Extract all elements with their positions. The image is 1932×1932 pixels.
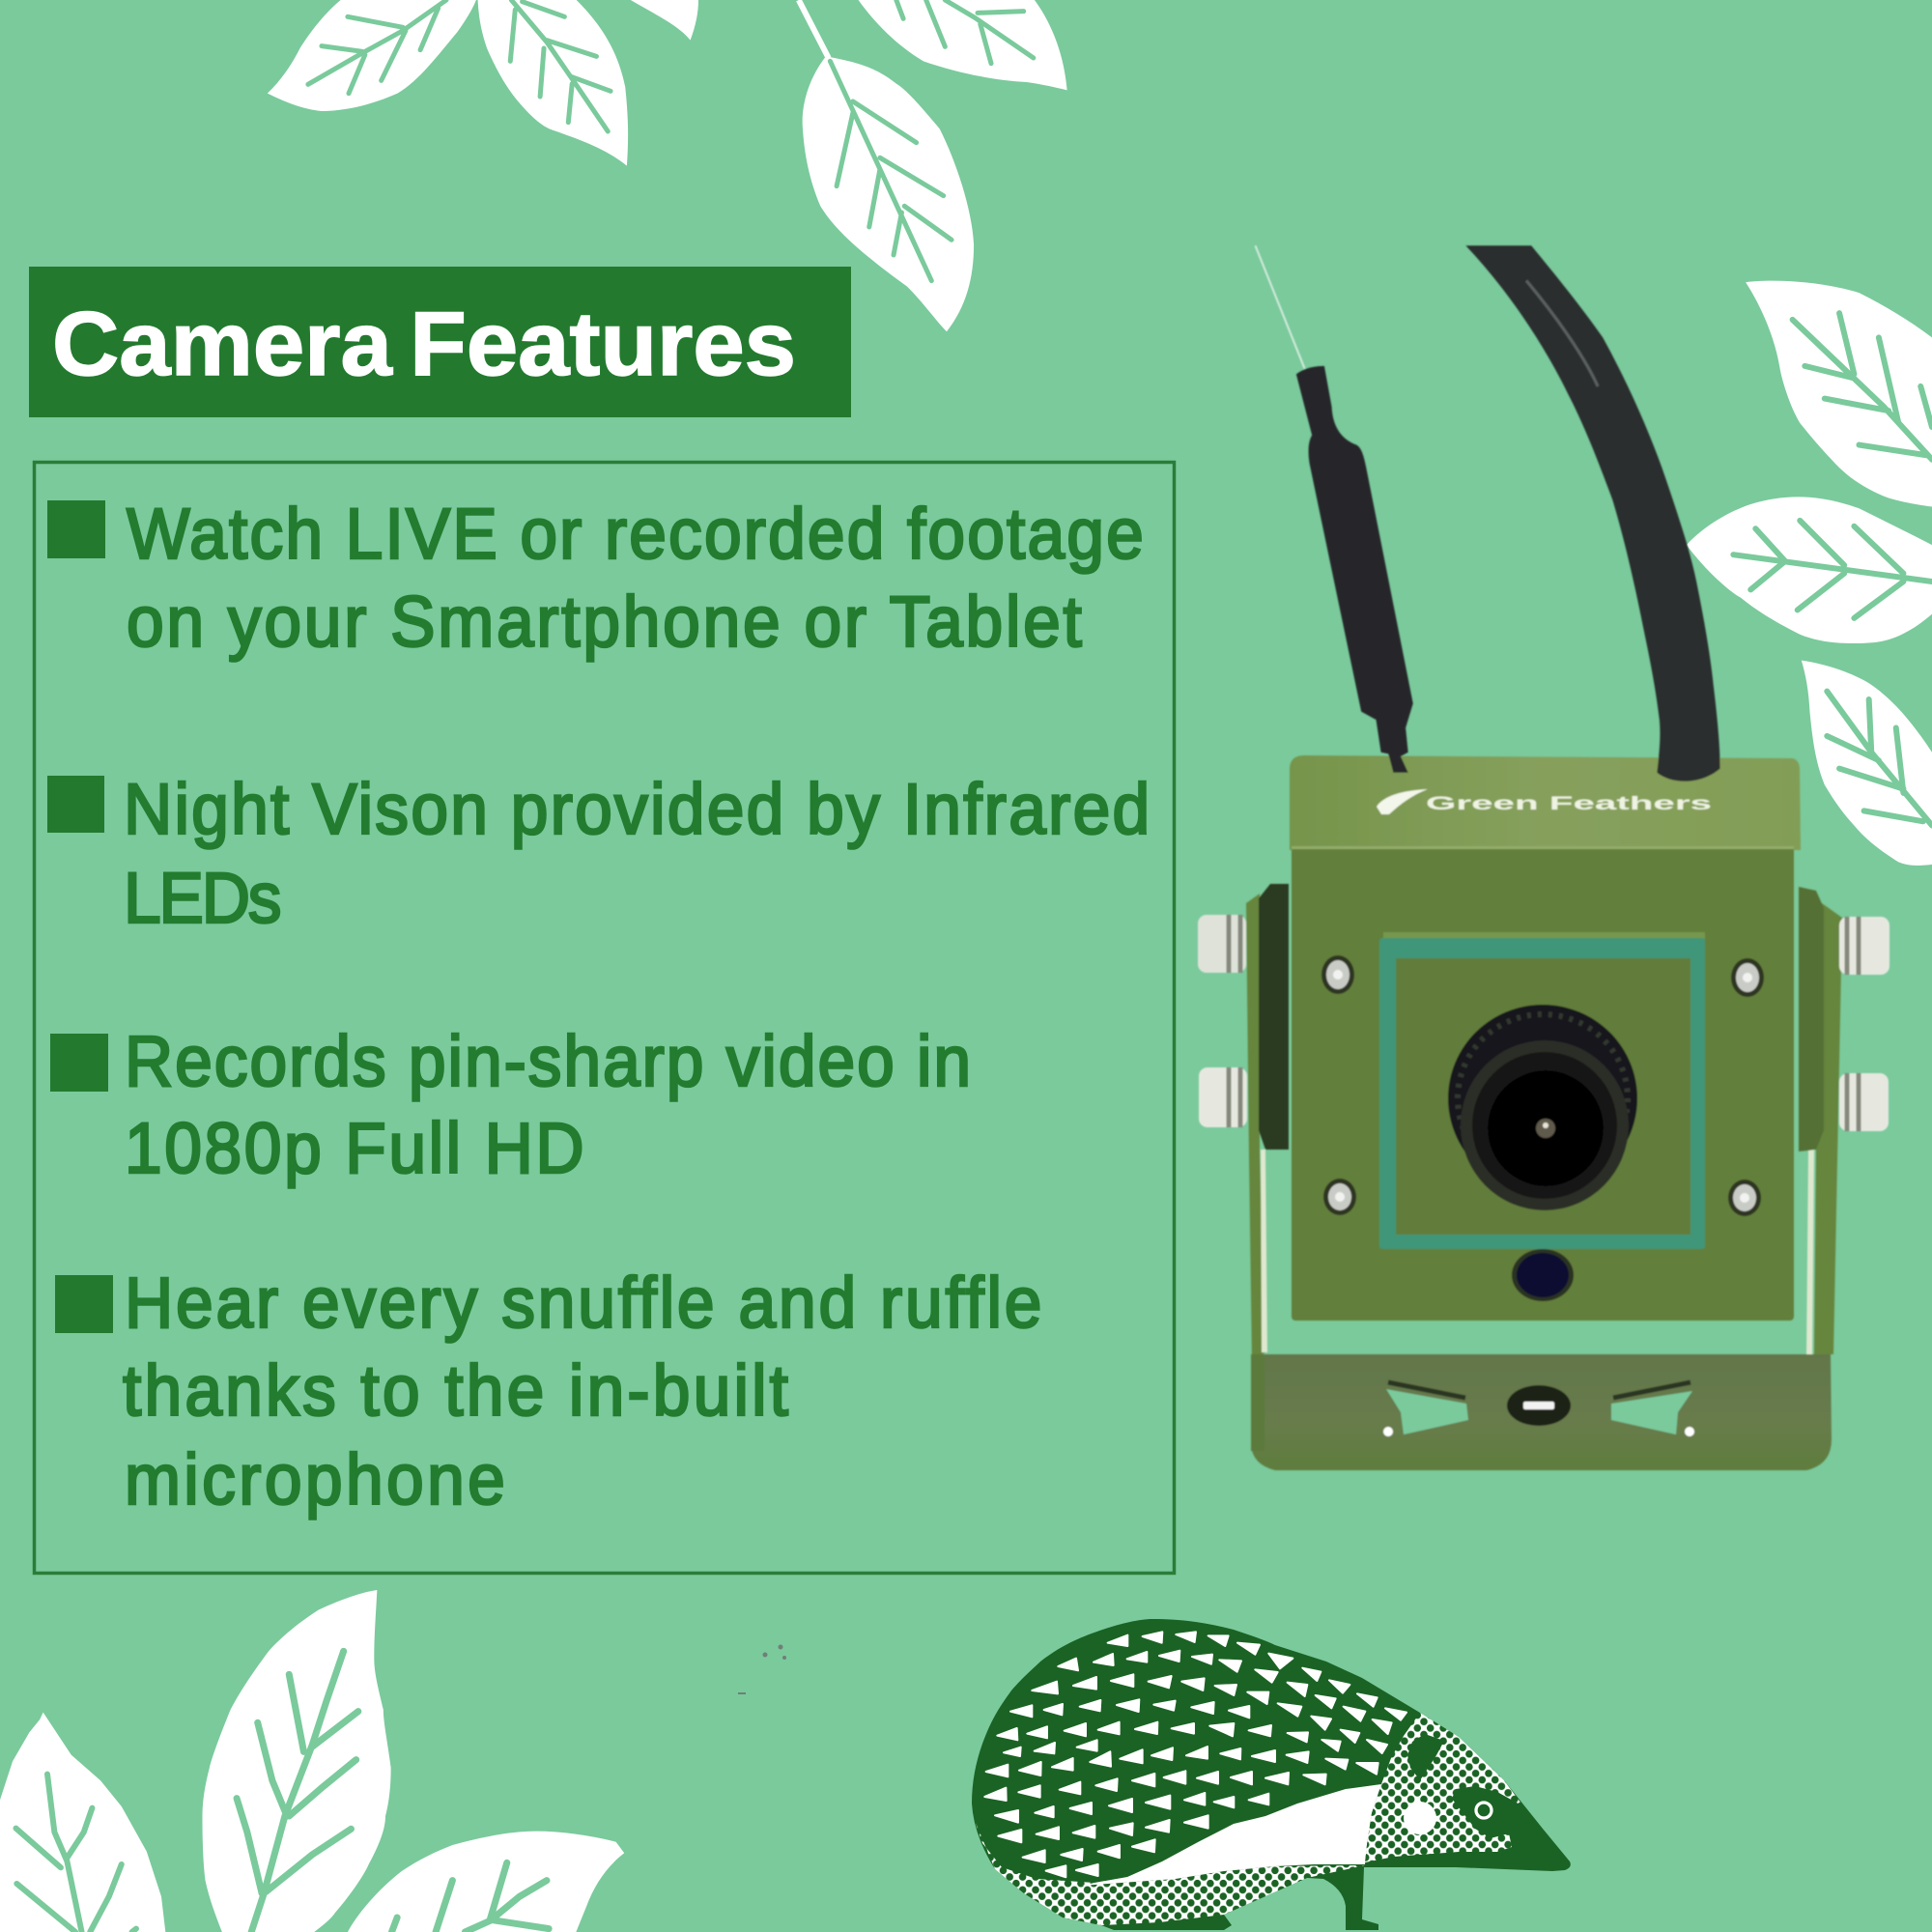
leaf: top right: [859, 0, 1067, 90]
feature: night vision: Night Vison provided by Infrared: [124, 770, 1150, 849]
hedgehog illustration: [972, 1619, 1571, 1930]
heading: Camera Features: [29, 267, 851, 417]
front top edge highlight: [1292, 846, 1794, 849]
bracket base: [1251, 1354, 1832, 1470]
halftone lower body: [976, 1823, 1365, 1925]
ear: [1407, 1734, 1444, 1780]
feature: microphone: Hear every snuffle and ruffle: [125, 1264, 1041, 1343]
top face: [1290, 755, 1801, 850]
camera logo: [1377, 789, 1712, 814]
power cable: [1465, 245, 1720, 781]
leaf: bottom far left: [0, 1713, 165, 1932]
top leaves: [268, 0, 1067, 331]
right leaves: [1687, 281, 1932, 866]
feature: night vision: LEDs: [124, 859, 282, 938]
hedgehog body: [972, 1619, 1571, 1930]
leaf: top fragment: [631, 0, 698, 41]
feature: live footage: on your Smartphone or Tablet: [127, 582, 1082, 662]
feature: full HD video: Records pin-sharp video in: [125, 1022, 971, 1101]
bottom left leaves: [0, 1590, 624, 1932]
arm highlights: [1261, 1150, 1814, 1354]
heading: Camera Features: Camera Features: [52, 293, 796, 394]
corner bolts: [1321, 955, 1764, 1216]
feature: full HD video: [50, 1022, 971, 1188]
leaf: right middle: [1687, 497, 1932, 643]
left mounting arm: [1246, 894, 1265, 1362]
leaf: right upper: [1746, 281, 1932, 507]
lens plate highlight: [1383, 932, 1705, 939]
leaf: right lower: [1802, 661, 1932, 866]
antenna and cable: [1255, 245, 1720, 781]
spines, rear: [984, 1632, 1293, 1877]
lens: [1448, 1005, 1637, 1210]
halftone head: [1365, 1713, 1523, 1862]
eye: [1476, 1803, 1492, 1818]
panel: features list: [35, 462, 1175, 1573]
leaf: top second: [478, 0, 628, 166]
side screws: [1198, 915, 1889, 1131]
bracket slots: [1383, 1382, 1694, 1436]
antenna wire: [1255, 245, 1305, 368]
camera photo: [1198, 245, 1889, 1470]
right mounting arm: [1814, 903, 1842, 1354]
feature: live footage: Watch LIVE or recorded footage: [127, 495, 1144, 574]
camera logo: Green Feathers: [1426, 794, 1712, 814]
left side plate: [1259, 884, 1289, 1150]
front face: [1292, 847, 1794, 1321]
antenna sleeve: [1296, 366, 1413, 773]
feature: microphone: [55, 1264, 1041, 1520]
bottom socket: [1507, 1385, 1571, 1426]
specks: [738, 1644, 786, 1694]
leaf: top left: [268, 0, 476, 111]
spines, front: [1265, 1668, 1406, 1784]
feature: night vision: [47, 770, 1150, 938]
feature: full HD video: 1080p Full HD: [125, 1109, 584, 1188]
leaf: bottom right: [348, 1832, 624, 1932]
feature: microphone: microphone: [125, 1440, 505, 1520]
teal lens plate: [1379, 938, 1705, 1249]
cheek: [1404, 1802, 1436, 1834]
leaf: bottom tall: [202, 1590, 391, 1932]
infrared LED: [1512, 1249, 1574, 1301]
leaf: top long with stem: [799, 0, 974, 331]
white belly stripe: [1082, 1784, 1381, 1886]
feature: microphone: thanks to the in-built: [123, 1351, 788, 1431]
base left shading: [1251, 1354, 1264, 1451]
feature: live footage: [47, 495, 1144, 662]
right side plate: [1799, 887, 1824, 1151]
